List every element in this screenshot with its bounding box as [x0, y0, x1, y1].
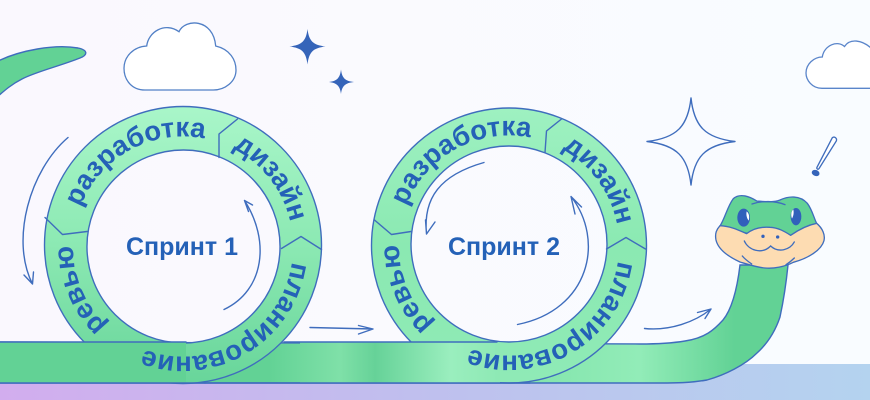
snake head: [716, 196, 824, 268]
arrow: inner ring 2 lower: [426, 162, 484, 234]
label: планирование: планирование: [142, 264, 306, 372]
cloud right: [806, 41, 870, 88]
arrow: inner ring 1: [224, 200, 260, 310]
snake body: [0, 265, 788, 383]
arrow: outer left: [23, 138, 68, 284]
sparkle outline: [647, 98, 735, 185]
labels ring 1: [58, 122, 306, 372]
eye left: [737, 209, 750, 227]
head top: [720, 196, 817, 237]
label: разработка 2: разработка: [394, 120, 531, 207]
heading: Спринт 2: Спринт 2: [448, 233, 560, 261]
cloud left: [124, 23, 236, 90]
eye right: [791, 208, 801, 225]
ring: sprint 1: [45, 106, 322, 384]
label: дизайн 2: дизайн: [560, 139, 631, 224]
tail: [0, 47, 86, 98]
arrow: toward head: [644, 309, 711, 329]
snout: [716, 223, 824, 268]
body overlap over ring 1: [0, 342, 186, 383]
heading: Спринт 1: Спринт 1: [126, 233, 238, 261]
ground strip: [0, 364, 870, 400]
labels ring 2: [384, 120, 632, 370]
sparkle large filled: [290, 29, 326, 64]
brow: [752, 202, 785, 205]
label: ревью: ревью: [58, 247, 110, 334]
arrow: between rings: [310, 326, 373, 334]
label: дизайн: дизайн: [230, 138, 304, 220]
segment dividers ring 1: [45, 119, 322, 250]
label: ревью 2: ревью: [384, 246, 436, 334]
label: разработка: разработка: [68, 122, 205, 208]
body overlap over ring 2: [300, 342, 500, 383]
exclamation mark: [811, 137, 837, 177]
segment dividers ring 2: [374, 119, 646, 249]
label: планирование 2: планирование: [468, 262, 632, 370]
ring: sprint 2: [372, 108, 647, 383]
sparkle small filled: [329, 70, 354, 94]
arrow: inner ring 2 upper: [518, 196, 588, 324]
nostrils: [761, 235, 765, 238]
mouth: [742, 241, 794, 265]
